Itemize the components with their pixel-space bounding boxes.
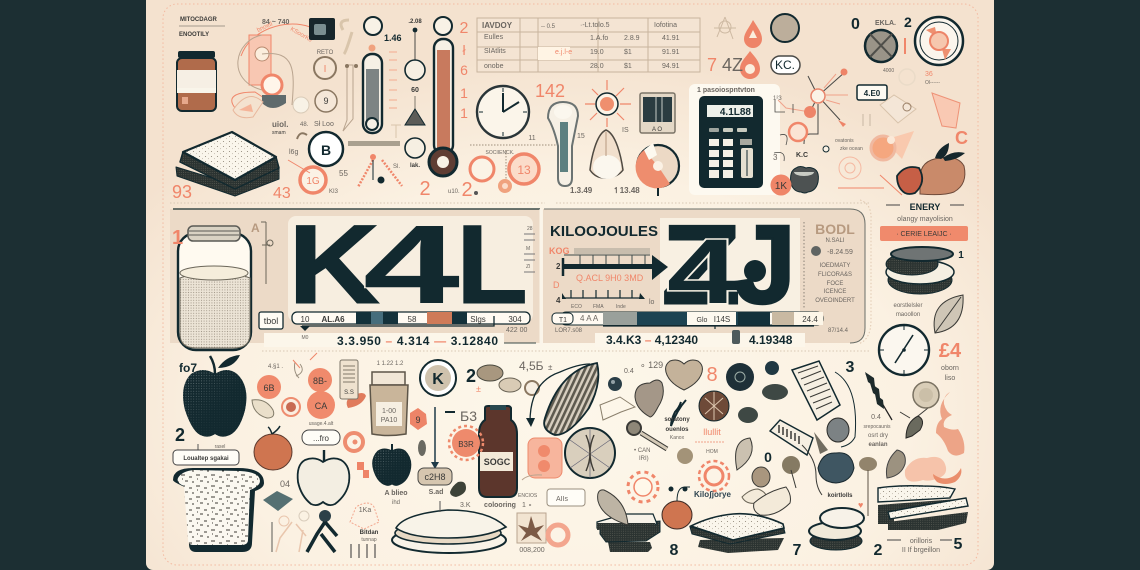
small foods center: ∘ 129	[640, 360, 663, 370]
small labels beside jar: tbol	[264, 316, 278, 326]
icon: dark apple small	[373, 444, 411, 506]
strip: kilojoule scale: 24.4	[802, 315, 818, 324]
numbers under pie: ↿13.48	[613, 186, 640, 195]
side list: body: OVEOINDERT	[815, 298, 855, 304]
coral label block: 1 ∘	[522, 502, 532, 509]
note card	[340, 360, 358, 399]
side list: body: IOEDMATY	[820, 263, 850, 269]
heading notes top left	[179, 17, 225, 38]
pill label: c2H8	[424, 472, 446, 482]
coral scale numbers: ł	[462, 42, 466, 58]
icon: k disc	[420, 360, 456, 396]
icon: striped loaf with arc arrow	[526, 363, 598, 435]
coral sketches top right	[835, 93, 968, 195]
table: Eulles	[484, 34, 504, 41]
icon: apple with label	[770, 152, 818, 196]
numbers: kcal values: 3.3.950 – 4.314 — 3.12840	[337, 334, 498, 348]
icon: white bread stack	[172, 132, 291, 202]
text and badges top right: Ol------	[925, 80, 940, 86]
coral label block: AIIs	[556, 496, 569, 503]
icon: small gauges	[300, 50, 337, 128]
stones: 2	[466, 366, 476, 386]
coral sketches top right: C	[955, 128, 968, 148]
unit marks beside heading: 28	[527, 226, 533, 232]
icon: sauce bottle: colooring	[484, 502, 516, 509]
fro label	[302, 421, 363, 451]
diagram: conversion arrow and rulers: Inde	[616, 304, 626, 310]
center text: soratony	[664, 417, 690, 423]
barcode tag	[770, 420, 822, 495]
tag and figures: 1Ka	[359, 507, 371, 514]
side list: body: FLICORA&S	[818, 272, 852, 278]
fro label: ...fro	[313, 434, 330, 443]
icon: k disc: K	[432, 371, 444, 388]
icon: calculator	[689, 84, 780, 195]
heading: kilojoules: KILOOJOULES	[550, 224, 658, 240]
coral numerals row: u10.	[448, 189, 460, 195]
icon: dark apple	[175, 355, 246, 445]
unit marks beside heading	[524, 226, 535, 272]
icon: sauce bottle: Б3	[460, 408, 477, 424]
coral badges: 6B	[263, 383, 275, 393]
note card: S.S	[344, 390, 354, 396]
icon: apple with label: 1K	[775, 181, 787, 192]
icon: beads and triangle scale: lak.	[410, 163, 420, 169]
coral badges: 8B-	[313, 376, 327, 386]
small labels beside jar: A	[251, 221, 260, 235]
center text: llullit	[703, 427, 721, 437]
icon: white apple	[263, 450, 349, 511]
icon: small gauges: 48.	[300, 122, 309, 128]
icon: sun gauge	[577, 80, 631, 140]
icon: coral rings: SOCIIENCK.	[486, 150, 514, 156]
icon: small gauges: I	[324, 64, 326, 75]
heading: K4L: 4	[363, 202, 460, 327]
coral sun badge	[449, 426, 483, 460]
heading notes top left: ENOOTILY	[179, 32, 209, 38]
text and leaf: eorstlelsler	[893, 303, 923, 309]
mid small foods: 9	[415, 415, 421, 425]
text and leaf: maoollon	[896, 312, 920, 318]
unit marks beside heading: Zl	[526, 264, 530, 270]
strip: kilojoule scale	[552, 312, 849, 334]
right column: energy	[858, 200, 968, 382]
icon: bread stack right	[878, 486, 968, 530]
icon: spoon: • CAN	[634, 448, 650, 454]
bottom numbers and caption: 5	[954, 536, 963, 553]
strip: kcal scale: 58	[408, 315, 417, 324]
fruit sprig: ♥	[858, 500, 863, 510]
text and leaf	[893, 295, 963, 333]
mid small foods	[410, 408, 471, 509]
strip: kilojoule scale: I14S	[714, 315, 730, 324]
coral badges: CA	[315, 401, 327, 411]
diagram: conversion arrow and rulers: lo	[649, 299, 655, 306]
icon: toast pieces	[742, 487, 790, 515]
heading: Z4J: Z	[662, 203, 740, 327]
icon: dark apple small: A blieo	[384, 490, 408, 497]
peach blob and stem plants	[859, 450, 961, 516]
icon: tomato	[254, 426, 292, 470]
bottom numbers and caption: II If brgeillon	[902, 547, 940, 554]
decorative arrows and hook	[341, 20, 358, 131]
diagram: conversion arrow and rulers: ECO	[571, 304, 582, 310]
leaf and nut: 0	[764, 449, 772, 465]
small foods center: 8	[706, 364, 718, 386]
dotted poster border	[163, 4, 978, 565]
brown star tile: 008,200	[519, 547, 545, 554]
icon: small gauges: RETO	[317, 50, 334, 56]
table: onobe	[484, 63, 504, 70]
icon: probe thermometer	[548, 102, 578, 186]
coral value	[939, 340, 962, 382]
side list: body: FOCE	[827, 281, 843, 287]
icon: sun and kilojoules label: Kiloʃjorye	[694, 490, 731, 499]
coral sketches top right: zke ocean	[840, 146, 863, 152]
diagram: conversion arrow and rulers	[549, 246, 668, 310]
icon: monitor: A O	[652, 127, 662, 133]
white vertical divider	[540, 209, 542, 345]
icon: compass	[879, 325, 929, 375]
icon: dark apple: fo7	[179, 361, 197, 375]
heading: K4L	[288, 202, 528, 327]
side list: body: N.SALI	[825, 238, 845, 244]
table: 19.0	[590, 49, 604, 56]
icon: clock	[477, 81, 565, 142]
strip: kcal scale: Slgs	[470, 315, 486, 324]
stones: 4,5Б	[519, 359, 544, 373]
brown star tile	[517, 513, 568, 554]
icon: right thermometer	[429, 17, 457, 176]
diagram: coral process sketch: uiol.	[272, 120, 288, 129]
pill label	[418, 468, 452, 496]
numbers under pie: 1.3.49	[570, 186, 593, 195]
numbers under pie	[570, 186, 640, 195]
icon: coral rings: 13	[517, 163, 531, 177]
icon: red fruit	[662, 486, 692, 529]
icon: big bread slab	[690, 514, 785, 553]
small labels beside jar	[251, 221, 283, 329]
small foods center	[600, 360, 718, 426]
icon: jar of flour: 1	[172, 227, 183, 249]
disc and coral fox	[913, 382, 964, 456]
unit marks beside heading: M	[526, 246, 530, 252]
icon: beads and triangle scale: 60	[411, 87, 419, 94]
leaf and nut	[736, 438, 800, 488]
bottom numbers and caption: orilloris	[910, 538, 933, 545]
icon: left thermometer	[348, 17, 402, 146]
table: 1.A.fo	[590, 35, 608, 42]
icon: stacked discs: 1	[958, 250, 964, 261]
round disc	[565, 428, 615, 478]
side list: body: -8.24.59	[827, 249, 853, 256]
coral badges: 4.§1 .	[268, 364, 283, 370]
strip: kcal scale: 422 00	[506, 327, 528, 334]
diagram: conversion arrow and rulers: FMA	[593, 304, 604, 310]
bottom numbers and caption	[670, 536, 963, 559]
icon: calculator: 4.1L88	[720, 107, 751, 118]
arrow from k	[431, 407, 455, 469]
strip: kilojoule scale: LOR7.s08	[555, 328, 583, 334]
text and badges top right: 4000	[883, 68, 894, 74]
table: 41.91	[662, 35, 680, 42]
icon: tan jar: PA10	[381, 417, 397, 424]
icon: small gauges: Sł Loo	[314, 121, 334, 128]
coral value: oborn	[941, 365, 959, 372]
icon: sauce bottle: SOGC	[484, 457, 511, 467]
side list: body: ICENCE	[824, 289, 846, 295]
rings and labels below gauges: 1G	[306, 176, 320, 187]
side list: body: BODL	[815, 221, 855, 237]
coral badges	[252, 353, 366, 419]
table: 94.91	[662, 63, 680, 70]
coral banner	[880, 226, 968, 241]
center text: Kanox	[670, 435, 685, 441]
numbers: kilojoule values: 4.19348	[749, 333, 793, 347]
table: ·-Lt.tolo.5	[580, 22, 610, 29]
side list: body	[804, 221, 855, 308]
table: IAVDOY	[482, 21, 513, 30]
text and badges top right: 0	[851, 16, 860, 33]
bottom section: foods	[173, 353, 968, 559]
icon: drops and ring group: KC.	[775, 58, 795, 72]
energy heading	[886, 202, 964, 223]
labelled box: Loualtep sgakai	[183, 456, 229, 462]
icon: left thermometer: 1.46	[384, 33, 402, 43]
icon: apple with label: K.C	[796, 152, 808, 159]
divider dotted row	[170, 202, 870, 204]
numbers: kilojoule values	[606, 330, 793, 347]
diagram: conversion arrow and rulers: KOG	[549, 246, 570, 256]
table: 2.8.9	[624, 35, 640, 42]
stones: ±	[548, 363, 553, 372]
icon: monitor	[640, 93, 675, 133]
labelled box: rasel	[215, 444, 225, 450]
icon: slice stack	[809, 508, 864, 550]
icon: drops and ring group: 7 4Z	[707, 55, 743, 75]
icon: wheel	[915, 17, 963, 65]
coral scale numbers: 1	[460, 105, 468, 121]
small foods center: 0.4	[624, 368, 634, 375]
diagram: coral process sketch: 84 ~ 740	[262, 19, 290, 26]
diagram: network of nodes: 3	[773, 153, 778, 162]
icon: small gauges: 9	[323, 96, 329, 106]
icon: slices with leaf	[597, 490, 660, 552]
labelled box	[173, 444, 239, 465]
table	[477, 18, 700, 72]
diagram: network of nodes	[773, 68, 848, 162]
icon: dark apple small: ihd	[392, 500, 400, 506]
icon: beads and triangle scale: Sl.	[393, 164, 400, 170]
coral scale numbers: 2	[460, 20, 469, 37]
icon: clock: 142	[535, 81, 565, 101]
diagram: coral process sketch: bnoetl	[256, 21, 274, 34]
icon: beads and triangle scale: .2.08	[408, 19, 422, 25]
tag and figures: tunnap	[361, 537, 377, 543]
table: Iofotina	[654, 22, 677, 29]
pie chart	[636, 143, 679, 196]
coral scale numbers: 1	[460, 85, 468, 101]
coral scale numbers	[460, 20, 469, 121]
wheat and text: osrt dry	[868, 433, 888, 439]
icon: peach and fruit	[871, 131, 965, 195]
cream poster panel	[146, 0, 994, 570]
table: 28.0	[590, 63, 604, 70]
icon: sauce bottle	[460, 405, 517, 509]
tag and figures	[272, 462, 379, 558]
tag and figures: Bitdan	[360, 530, 379, 536]
center text	[664, 417, 725, 455]
rings and labels below gauges	[288, 132, 402, 195]
dotted divider below bands	[262, 350, 870, 352]
icon: white bread stack: 43	[273, 185, 291, 202]
icon: flatbread stack	[392, 501, 506, 553]
diagram: network of nodes: 1²3	[773, 96, 782, 102]
coral label block: ENCIOS	[518, 493, 538, 499]
diagram: conversion arrow and rulers: 4	[556, 296, 561, 305]
text and badges top right	[851, 14, 940, 100]
icon: white apple: 04	[280, 479, 290, 489]
strip: kcal scale: AL.A6	[321, 315, 345, 324]
icon: clock: 11	[528, 135, 536, 142]
energy heading: olangy mayolision	[897, 216, 953, 223]
diagram: coral process sketch: KSoorKo	[289, 27, 313, 44]
icon: drops and ring group	[707, 14, 800, 79]
fruit sprig	[814, 418, 863, 510]
diagram: conversion arrow and rulers: Q.ACL 9H0 3MD	[576, 273, 644, 283]
icon: tan jar: 1 1.22 1.2	[377, 361, 404, 367]
coral value: liso	[945, 375, 955, 382]
table: SIAtlits	[484, 48, 506, 55]
icon: sun gauge: 15	[577, 133, 585, 140]
panel: kilojoules band	[543, 203, 865, 347]
strip: kcal scale	[292, 312, 530, 341]
fro label: usage.4.alt	[309, 421, 334, 427]
coral scale numbers: 6	[460, 62, 468, 78]
icon: beads and triangle scale	[393, 19, 425, 170]
icon: pear shaped flask	[590, 130, 623, 179]
stones	[466, 359, 553, 395]
icon: spoon: IRI)	[639, 456, 649, 462]
diagram: conversion arrow and rulers: D	[553, 280, 560, 290]
coral numerals row	[419, 178, 478, 201]
icon: sun and kilojoules label	[628, 461, 731, 502]
wheat and text: 0.4	[871, 414, 881, 421]
heading: Z4J: 4	[667, 221, 739, 323]
diagram: conversion arrow and rulers: 2	[556, 262, 561, 271]
table: e.j.l-e	[555, 49, 572, 56]
icon: tan jar	[370, 361, 408, 436]
wheat and text	[864, 372, 928, 448]
heading: Z4J	[662, 203, 796, 327]
icon: white bread stack: 93	[172, 182, 192, 202]
coral numerals row: 2	[419, 178, 431, 200]
icon: spoon	[627, 421, 693, 464]
bottom numbers and caption: 8	[670, 542, 679, 559]
center text: HOM	[706, 449, 718, 455]
coral sketches top right: ovatonis	[835, 138, 854, 144]
icon: coral rings	[470, 145, 562, 193]
heading notes top left: MITOCDAGR	[180, 17, 218, 23]
coral banner: · CERIE LEAIJC ·	[896, 231, 952, 238]
coral numerals row: 2	[461, 179, 473, 201]
panel: kcal band	[170, 202, 540, 350]
heading: K4L: K	[288, 202, 380, 327]
heading: Z4J: J	[734, 203, 796, 327]
strip: kilojoule scale: 87/14.4	[828, 328, 849, 334]
rings and labels below gauges: B	[321, 142, 331, 158]
coral value: £4	[939, 340, 962, 362]
numbers: kilojoule values: 3.4.K3 – 4,12340	[606, 333, 698, 347]
icon: dark apple: 2	[175, 425, 185, 445]
strip: kilojoule scale: Glo	[697, 317, 708, 324]
top section: measuring and energy icons	[172, 14, 968, 202]
text and badges top right: 36	[925, 71, 933, 78]
coral label block	[518, 438, 585, 509]
icon: calculator: 1 pasoiospntvton	[697, 87, 755, 94]
icon: bread slice	[173, 468, 264, 552]
strip: kilojoule scale: 4 A A	[580, 314, 599, 323]
paper note: 3	[846, 359, 855, 376]
icon: jam jar	[177, 51, 216, 111]
bottom numbers and caption: 7	[793, 542, 802, 559]
icon: jar of flour	[172, 226, 251, 350]
wheat and text: eanlan	[868, 442, 888, 448]
strip: kilojoule scale: T1	[559, 317, 567, 324]
table: -- 0.5	[541, 24, 556, 30]
table: $1	[624, 63, 632, 70]
table: 91.91	[662, 49, 680, 56]
icon: crossed disc	[865, 30, 905, 62]
diagram: coral process sketch: smam	[272, 130, 286, 136]
mid small foods: 3.K	[460, 502, 471, 509]
energy heading: ENERY	[910, 202, 940, 212]
text and badges top right: EKLA.	[875, 20, 896, 27]
diagram: coral process sketch	[232, 19, 313, 136]
pill label: S.ad	[429, 489, 443, 496]
icon: walking figures	[276, 510, 337, 552]
strip: kcal scale: 304	[508, 315, 522, 324]
dial and cookie	[699, 361, 788, 423]
icon: stacked discs	[886, 247, 964, 294]
heading: K4L: L	[456, 202, 528, 327]
stones: ±	[476, 384, 481, 394]
text and badges top right: 2	[904, 14, 912, 30]
table: $1	[624, 49, 632, 56]
rings and labels below gauges: l6g	[289, 149, 298, 156]
wheat and text: srepocaunis	[864, 424, 891, 430]
bottom numbers and caption: 2	[874, 542, 883, 559]
icon: tan jar: 1-00	[382, 408, 396, 415]
paper note	[792, 359, 856, 447]
text and badges top right: 4.E0	[864, 89, 881, 98]
center text: ouenlos	[665, 427, 689, 433]
rings and labels below gauges: KI3	[329, 189, 339, 195]
strip: kcal scale: M0	[302, 335, 309, 341]
icon: square dial	[309, 18, 335, 40]
coral sun badge: B3R	[458, 440, 474, 449]
icon: sun gauge: IS	[622, 127, 629, 134]
fruit sprig: koirtlolls	[827, 493, 853, 499]
strip: kcal scale: 10	[301, 315, 310, 324]
rings and labels below gauges: 55	[339, 169, 348, 178]
